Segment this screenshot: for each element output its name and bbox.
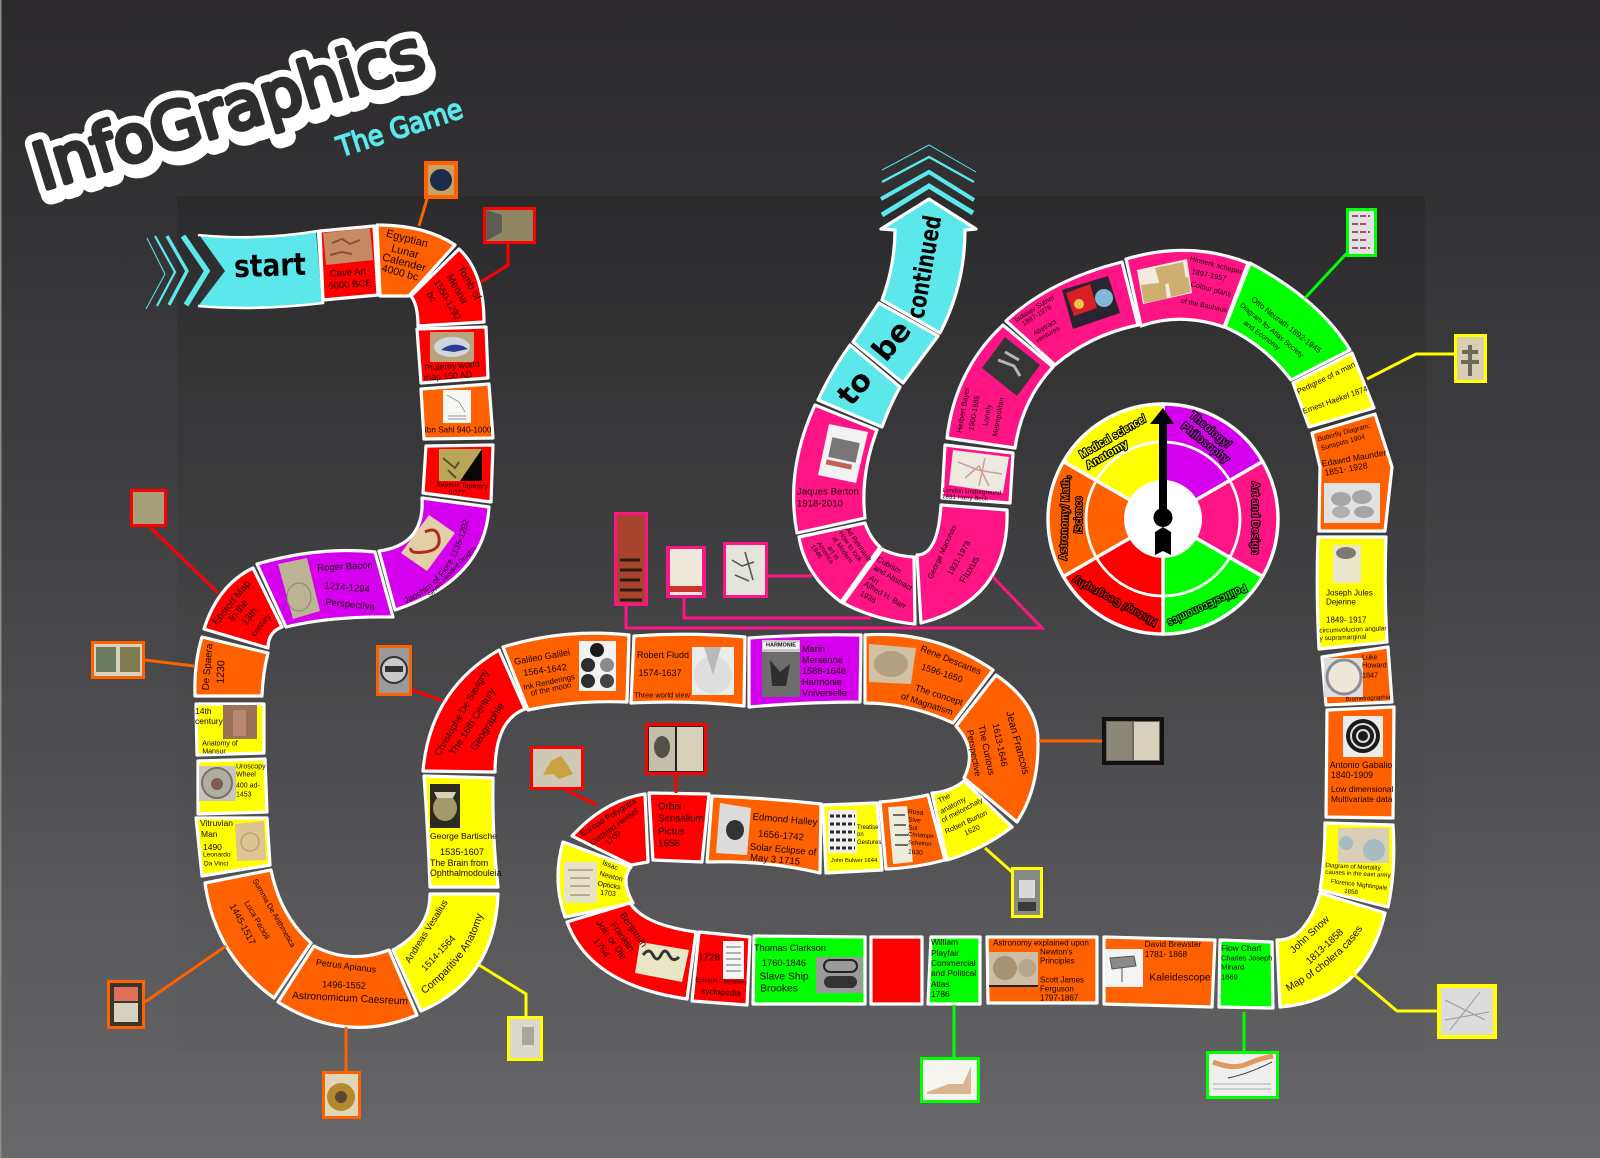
cell: George Macunas: Fluxus <box>958 554 982 586</box>
cell: Rene Descartes: of Magnatism <box>900 691 954 717</box>
cell: Ebstorf Map: 13th <box>240 606 260 628</box>
cell: Christophe De Savigny <box>423 650 525 772</box>
end chevrons <box>881 145 976 215</box>
cell: Antonio Gabalio: Multivariate data <box>1331 794 1393 804</box>
cell: Ibn Sahl: Ibn Sahl 940-1000 <box>425 426 492 434</box>
cell: Jaochim of Fiore: Seven Headed Dragon <box>427 545 478 599</box>
cell: Treatise on Gestures: on <box>857 832 864 838</box>
cell: Summa De Arithmetica <box>205 870 311 998</box>
cell: continued arrow: continued <box>901 213 947 321</box>
cell: Otto Neurath: and Economy <box>1242 318 1283 352</box>
cell: Luke Howard: Brometrographia <box>1346 695 1391 703</box>
cell: Benjamin Franklin Join or Die <box>567 903 696 999</box>
cell: Marin Mersenne: Vniverselle <box>802 688 847 698</box>
cell: Uroscopy Wheel: 400 ad- <box>236 782 260 790</box>
cell: Rene Descartes <box>865 634 993 723</box>
cell: Vitruvian Man <box>196 818 270 876</box>
cell: David Brewster: David Brewster <box>1145 939 1202 949</box>
cell: Astronomy explained: Principles <box>1040 956 1075 966</box>
cell: Issac Newton Opticks <box>558 842 633 917</box>
cell: Benjamin Franklin Join or Die: 1754 <box>590 936 612 960</box>
cell: Flow Chart Minard <box>1219 940 1273 1008</box>
cell: Ebstorf Map <box>204 568 282 648</box>
cell: Egyptian Lunar Calender: Egyptian <box>385 228 429 250</box>
cell: Edmond Halley: 1656-1742 <box>758 829 804 843</box>
cell: Marin Mersenne: 1588-1648 <box>802 666 846 676</box>
cell: George Macunas: 1931-1978 <box>946 539 973 577</box>
cell: Rosa Sive Sol: Sol <box>908 825 918 832</box>
cell: Ernest Haekel: Ernest Haekel 1874 <box>1301 384 1369 416</box>
cell: Edawrd Maunder <box>1312 414 1392 531</box>
cell: Marin Mersenne <box>749 635 861 707</box>
cell: Andreas Vesalius: Andreas Vesalius <box>402 897 450 965</box>
cell: Thomas Clarkson <box>753 936 865 1004</box>
cell: Flow Chart Minard: 1869 <box>1221 972 1238 982</box>
thumbnail: Robert Burton <box>985 848 1043 918</box>
cell: Petrus Apianus: Petrus Apianus <box>315 957 377 975</box>
cell: Hinnerk scheper: Colour plans <box>1190 279 1232 299</box>
title: InfoGraphics <box>25 16 433 205</box>
cell: Jaques Berton: Jaques Berton <box>797 486 859 498</box>
cell: George Bartische <box>424 776 502 887</box>
cell: continued arrow <box>881 199 976 333</box>
cell: Egyptian Lunar Calender: Calender <box>381 251 427 275</box>
cell: Jean Francois: The Curious <box>976 724 998 776</box>
cell: start <box>198 231 323 308</box>
cell: Jaques Berton <box>794 405 877 533</box>
cell: London underground: 1931 Harry Beck <box>942 493 989 503</box>
cell: ladislav Sutner: ladislav Sutner <box>1014 294 1057 324</box>
spinner arrow <box>1150 408 1174 555</box>
cell: blank red square <box>871 937 922 1004</box>
cell: George Bartische: The Brain from <box>430 858 488 868</box>
cell: Herbert Bayer: 1900-1985 <box>966 395 982 431</box>
cell: David Brewster: 1781- 1868 <box>1145 949 1188 959</box>
cell: Joseph Jules Dejerine <box>1317 537 1388 649</box>
cell: Hinnerk scheper: 1897-1957 <box>1191 267 1227 283</box>
cell: William Playfair: Atlas <box>931 979 950 989</box>
cell: David Brewster <box>1104 937 1215 1007</box>
cell: Herbert Bayer <box>947 325 1053 448</box>
cell: Christophe De Savigny: Christophe De Savigny <box>433 668 491 758</box>
cell: Robert Burton: Robert Burton <box>943 808 989 836</box>
cell: be <box>853 303 938 383</box>
thumbnail: Egyptian calendar <box>419 161 458 226</box>
cell: Ibn Sahl <box>421 384 493 439</box>
cell: Galileo Galilei: Galileo Galilei <box>513 647 571 667</box>
cell: Uroscopy Wheel: Wheel <box>236 772 256 778</box>
thumbnail: Tomb of Menna <box>481 207 536 282</box>
cell: to: to <box>830 363 880 413</box>
cell: Europa Polygotta: 1700 <box>603 828 623 847</box>
title: InfoGraphics <box>25 16 433 205</box>
thumbnail: Neurath <box>1305 208 1377 298</box>
cell: Antonio Gabalio: 1840-1909 <box>1331 770 1373 780</box>
cell: Benjamin Franklin Join or Die: Join or Die <box>593 918 629 962</box>
cell: Europa Polygotta: Europa Polygotta <box>578 796 638 838</box>
cell: Rosa Sive Sol: Scheiner <box>908 840 932 848</box>
cell: Herbert Bayer: Metropolitan <box>990 397 1006 437</box>
spinner wheel: Art and Design <box>1249 482 1261 555</box>
spinner wheel: Astronomy/ Math, <box>1058 475 1072 561</box>
thumbnail: Summa <box>107 946 226 1029</box>
cell: Luke Howard: Luke <box>1362 652 1378 662</box>
cell: Jean Francois: Perspective <box>965 729 983 777</box>
spinner wheel: Anatomy <box>1084 438 1131 472</box>
cell: Andreas Vesalius: Comparitive Anatomy <box>422 913 484 993</box>
cell: Joseph Jules Dejerine: y supramarginal <box>1319 634 1367 642</box>
cell: Astronomy explained: 1797-1867 <box>1040 994 1079 1002</box>
cell: Issac Newton Opticks: Newton <box>599 871 623 883</box>
cell: Cubism and Abstract Art <box>843 549 915 624</box>
cell: Joseph Jules Dejerine: circumvolucion angular <box>1319 625 1388 635</box>
cell: Florence Nightingale <box>1320 823 1394 907</box>
thumbnail: Europa Polygotta <box>530 746 597 805</box>
cell: Antonio Gabalio <box>1326 707 1394 818</box>
thumbnail: Fluxus poster <box>614 512 1042 628</box>
cell: Ephriam Chambers 1728: Ephriam Chambers <box>695 978 747 986</box>
cell: Joseph Jules Dejerine: Joseph Jules <box>1326 588 1373 598</box>
cell: Egyptian Lunar Calender <box>377 225 455 296</box>
start chevrons <box>146 236 207 309</box>
cell: Cubism and Abstract Art: Cubism <box>875 554 903 576</box>
cell: Egyptian Lunar Calender: 4000 bc <box>380 262 420 284</box>
cell: Ad Reinhardt: Ad Reinhardt <box>844 527 872 563</box>
cell: Treatise on Gestures: Treatise <box>857 825 879 831</box>
cell: Galileo Galilei: of the moon <box>530 680 572 698</box>
cell: Bayeux Tapestry <box>423 445 493 502</box>
cell: Ad Reinhardt: art in <box>826 545 840 561</box>
cell: Robert Fludd: Robert Fludd <box>637 650 689 660</box>
thumbnail: Reinhardt chart <box>723 542 812 598</box>
cell: Cave Art <box>320 226 378 300</box>
cell: Astronomy explained: Astronomy explained upon <box>993 938 1089 948</box>
cell: Flow Chart Minard: Charles Joseph <box>1221 954 1272 962</box>
cell: Treatise on Gestures: John Bulwer 1644 <box>831 858 878 864</box>
cell: Ebstorf Map: In the <box>227 597 251 624</box>
cell: Cubism and Abstract Art: 1936 <box>858 589 878 605</box>
cell: Cubism and Abstract Art: Art <box>867 574 881 587</box>
cell: Uroscopy Wheel: Uroscopy <box>236 764 266 770</box>
thumbnail: Playfair chart <box>920 1005 980 1103</box>
cell: Issac Newton Opticks: Issac <box>601 860 619 872</box>
thumbnail: De Savigny <box>376 645 443 701</box>
cell: Bayeux Tapestry: Bayeux Tapestry <box>436 481 488 491</box>
cell: Roger Bacon: 1214-1294 <box>324 581 370 595</box>
cell: Edawrd Maunder: Butterfly Diagram: <box>1317 423 1371 443</box>
cell: Otto Neurath: Otto Neurath 1892-1945 <box>1249 295 1323 355</box>
cell: De Spaera <box>195 637 268 696</box>
cell: John Snow <box>1275 892 1387 1009</box>
cell: Petrus Apianus <box>278 946 417 1027</box>
cell: Andreas Vesalius <box>391 892 500 1013</box>
cell: William Playfair <box>928 937 980 1004</box>
cell: Cubism and Abstract Art: and Abstract <box>872 563 915 593</box>
cell: Jean Francois: Jean Francois <box>1003 710 1031 776</box>
cell: start: start <box>233 247 307 285</box>
thumbnail: Petrus Apianus <box>322 1027 361 1119</box>
cell: Robert Burton: of melonchaly <box>940 795 985 825</box>
cell: Ebstorf Map: Ebstorf Map <box>211 578 254 627</box>
cell: George Bartische: 1535-1607 <box>440 847 484 857</box>
cell: Herbert Bayer: Lonely <box>981 403 993 427</box>
spinner wheel: History/ Geography <box>1070 573 1159 628</box>
cell: be: be <box>865 314 919 368</box>
cell: Rene Descartes: 1596-1650 <box>920 662 964 684</box>
cell: Edawrd Maunder: Edawrd Maunder <box>1321 447 1387 469</box>
cell: Astronomy explained: Scott James <box>1040 976 1084 984</box>
cell: Ad Reinhardt: at Modern <box>830 535 854 565</box>
thumbnail: Haekel <box>1367 334 1487 383</box>
cell: Galileo Galilei: 1564-1642 <box>523 662 567 678</box>
cell: Vitruvian Man: Vitruvian <box>200 818 233 828</box>
title: InfoGraphics <box>28 23 436 212</box>
cell: Benjamin Franklin Join or Die: Franklin <box>608 920 636 954</box>
cell: Cave Art: 6000 BCE <box>328 278 372 292</box>
cell: Robert Burton: anatomy <box>938 794 968 816</box>
cell: Hinnerk scheper: Hinnerk scheper <box>1189 254 1244 276</box>
cell: Rene Descartes: Rene Descartes <box>919 643 983 677</box>
cell: Orbis Sensalium Pictus: Pictus <box>658 826 685 838</box>
thumbnail: De Spaera <box>91 641 194 679</box>
cell: Vitruvian Man: Leonardo <box>203 852 231 858</box>
cell: Cubism and Abstract Art: Alfred H. Barr <box>862 579 908 611</box>
thumbnail: Ebstorf Map <box>130 489 218 593</box>
cell: Edmond Halley: Solar Eclipse of <box>749 842 817 858</box>
cell: Astronomy explained: Newton's <box>1040 948 1073 956</box>
cell: Ephriam Chambers 1728 <box>692 932 750 1005</box>
cell: Marin Mersenne: Harmonie <box>802 677 842 687</box>
cell: George Bartische: George Bartische <box>430 831 497 841</box>
cell: Hinnerk scheper <box>1126 250 1248 327</box>
cell: Robert Fludd: 1574-1637 <box>638 668 682 678</box>
cell: Antonio Gabalio: Low dimensional <box>1331 784 1394 794</box>
cell: Roger Bacon: Perspectiva <box>325 597 376 613</box>
cell: to <box>818 345 900 427</box>
cell: Jean Francois: 1613-1646 <box>991 722 1009 768</box>
cell: Europa Polygotta: Gottfried Hensel <box>588 806 640 848</box>
cell: Orbis Sensalium Pictus: Sensalium <box>658 814 704 824</box>
thumbnail: Cubism chart <box>666 546 871 618</box>
cell: Edmond Halley <box>707 796 821 873</box>
cell: William Playfair: and Political <box>931 968 976 978</box>
cell: Ad Reinhardt: 1946 <box>809 544 823 560</box>
cell: George Bartische: Ophthalmodouleia <box>430 868 502 878</box>
cell: George Macunas <box>917 505 1007 623</box>
cell: Robert Burton <box>932 781 1012 860</box>
cell: John Snow: Map of cholera cases <box>1286 926 1362 992</box>
cell: London underground: London Underground <box>943 487 1002 497</box>
cell: Joseph Jules Dejerine: 1849- 1917 <box>1326 616 1367 624</box>
cell: Edawrd Maunder: 1851- 1928 <box>1324 460 1368 478</box>
cell: George Macunas: George Macunas <box>926 524 958 580</box>
cell: ladislav Sutner <box>1006 262 1138 365</box>
cell: Thomas Clarkson: Slave Ship <box>759 972 809 982</box>
cell: William Playfair: Playfair <box>931 948 959 958</box>
cell: Treatise on Gestures <box>823 803 882 873</box>
cell: De Spaera: 1230 <box>215 660 227 684</box>
cell: Marin Mersenne: HARMONIE <box>766 642 796 648</box>
cell: De Spaera: De Spaera <box>200 643 216 691</box>
cell: Cave Art: Cave Art <box>329 266 367 280</box>
cell: Ebstorf Map: century <box>249 612 273 638</box>
cell: Marin Mersenne: Marin <box>802 644 825 654</box>
cell: Flow Chart Minard: Minard <box>1221 962 1244 972</box>
cell: Antonio Gabalio: Antonio Gabalio <box>1330 760 1392 770</box>
cell: Edmond Halley: Edmond Halley <box>752 812 818 828</box>
cell: Uroscopy Wheel: 1453 <box>236 792 252 798</box>
cell: Treatise on Gestures: Gestures <box>857 840 881 846</box>
cell: Ptolemy world map: Ptolemy world <box>424 359 480 373</box>
cell: Robert Fludd: Three world view <box>634 690 691 700</box>
cell: Roger Bacon: Roger Bacon <box>317 560 373 574</box>
spinner wheel: Theology/ <box>1187 409 1233 451</box>
cell: Otto Neurath: Diagram for Atlas Society <box>1238 301 1306 360</box>
cell: Orbis Sensalium Pictus: Orbis <box>658 802 682 812</box>
cell: Tomb of Menna: 1550-1292 <box>431 278 463 322</box>
cell: Galileo Galilei <box>503 633 629 710</box>
spinner wheel <box>1048 404 1278 634</box>
cell: Thomas Clarkson: Brookes <box>760 984 798 994</box>
subtitle: The Game <box>332 92 467 164</box>
cell: Petrus Apianus: Astronomicum Caesreum <box>292 990 408 1008</box>
cell: Flow Chart Minard: Flow Chart <box>1221 943 1262 953</box>
cell: Ad Reinhardt: How to look <box>837 530 863 564</box>
cell: Edmond Halley: May 3 1715 <box>750 852 800 868</box>
thumbnail: John Snow map <box>1352 973 1497 1039</box>
cell: Jaochim of Fiore <box>377 496 491 612</box>
cell: Christophe De Savigny: Geographie <box>469 701 507 753</box>
cell: Galileo Galilei: Ink Renderings <box>522 672 576 692</box>
cell: Joseph Jules Dejerine: Dejerine <box>1326 598 1356 606</box>
cell: Florence Nightingale: 1858 <box>1344 888 1359 896</box>
cell: ladislav Sutner: ventures <box>1035 325 1062 345</box>
cell: Jean Francois <box>956 675 1038 822</box>
cell: 14th century Anatomy of Mansur: 14th <box>195 706 212 716</box>
cell: Christophe De Savigny: The 16th Century <box>448 686 498 758</box>
cell: Ad Reinhardt: America <box>815 541 835 565</box>
cell: Roger Bacon <box>257 550 393 627</box>
cell: William Playfair: William <box>931 937 958 947</box>
cell: David Brewster: Kaleidescope <box>1149 972 1211 984</box>
cell: Robert Burton: The <box>936 791 952 805</box>
cell: Summa De Arithmetica: Summa De Arithmetica <box>251 877 298 950</box>
cell: Ernest Haekel: Pedigree of a man <box>1295 360 1357 396</box>
cell: Rosa Sive Sol: Rosa <box>908 809 924 817</box>
cell: Luke Howard: 1847 <box>1362 670 1378 680</box>
cell: Benjamin Franklin Join or Die: Benjamin <box>617 910 649 950</box>
cell: William Playfair: 1786 <box>931 989 950 999</box>
cell: Rosa Sive Sol <box>880 795 945 869</box>
cell: 14th century Anatomy of Mansur <box>195 704 264 756</box>
cell: Florence Nightingale: Florence Nightingale <box>1330 878 1388 892</box>
cell: Edawrd Maunder: Sunspots 1904 <box>1320 434 1366 452</box>
cell: Egyptian Lunar Calender: Lunar <box>390 243 420 262</box>
cell: Thomas Clarkson: 1760-1846 <box>762 958 806 968</box>
cell: 14th century Anatomy of Mansur: Anatomy of <box>202 740 238 748</box>
cell: Andreas Vesalius: 1514-1564 <box>419 933 457 973</box>
cell: Vitruvian Man: Man <box>201 829 218 839</box>
cell: Jaques Berton: 1918-2010 <box>797 498 843 510</box>
cell: Ad Reinhardt <box>799 523 880 602</box>
cell: Issac Newton Opticks: Opticks <box>597 881 622 892</box>
cell: Luke Howard <box>1322 647 1392 705</box>
cell: Jaochim of Fiore: Jaochim of Fiore 1135-1202 <box>404 520 469 603</box>
cell: Robert Fludd <box>631 634 745 706</box>
cell: Summa De Arithmetica: Luca Pacioli <box>242 899 272 941</box>
cell: 14th century Anatomy of Mansur: century <box>195 716 224 726</box>
spinner wheel: /Science <box>1073 496 1085 534</box>
spinner wheel: Politics/Economics <box>1165 581 1249 629</box>
cell: Issac Newton Opticks: 1703 <box>600 890 616 898</box>
cell: Bayeux Tapestry: 1077 <box>449 489 465 497</box>
cell: Europa Polygotta <box>572 794 648 865</box>
cell: Herbert Bayer: Herbert Bayer <box>955 386 972 433</box>
cell: Florence Nightingale: causes in the east army <box>1325 869 1392 879</box>
cell: Summa De Arithmetica: 1445-1517 <box>228 902 258 946</box>
cell: Ptolemy world map: map 150 AD <box>423 369 473 383</box>
thumbnail: Jean Francois <box>1039 717 1164 765</box>
cell: Ephriam Chambers 1728: 1728 <box>698 952 721 964</box>
thumbnail: Orbis <box>645 723 707 793</box>
cell: Tomb of Menna: Tomb of <box>454 264 484 302</box>
spinner wheel: Philosophy <box>1178 420 1232 466</box>
cell: Orbis Sensalium Pictus: 1658 <box>658 838 680 850</box>
cell: John Snow: 1813-1858 <box>1304 927 1346 967</box>
cell: 14th century Anatomy of Mansur: Mansur <box>202 748 226 756</box>
cell: ladislav Sutner: Abstract <box>1032 319 1058 337</box>
cell: Luke Howard: Howard <box>1362 660 1387 670</box>
cell: Astronomy explained <box>987 937 1097 1003</box>
thumbnail: Vesalius <box>479 965 543 1061</box>
cell: London underground <box>942 445 1013 503</box>
cell: Tomb of Menna <box>411 249 484 326</box>
spinner wheel: Medical science/ <box>1078 413 1148 461</box>
cell: Florence Nightingale: Diagram of Mortality <box>1325 862 1382 872</box>
cell: Ptolemy world map <box>417 327 488 383</box>
cell: Hinnerk scheper: of the Bauhaus <box>1180 298 1228 314</box>
cell: Robert Burton: 1620 <box>963 822 981 838</box>
cell: William Playfair: Commercial <box>931 958 976 968</box>
cell: Tomb of Menna: Menna <box>444 272 470 306</box>
cell: Orbis Sensalium Pictus <box>649 793 709 862</box>
cell: Vitruvian Man: Da Vinci <box>204 860 228 868</box>
cell: Uroscopy Wheel <box>198 759 267 814</box>
cell: Ernest Haekel <box>1293 353 1374 427</box>
cell: Astronomy explained: Ferguson <box>1040 984 1074 994</box>
cell: Rene Descartes: The concept <box>914 683 965 708</box>
cell: Petrus Apianus: 1496-1552 <box>322 979 366 991</box>
cell: Rosa Sive Sol: Sive <box>908 817 921 825</box>
cell: ladislav Sutner: 1897-1976 <box>1021 304 1053 328</box>
cell: John Snow: John Snow <box>1288 914 1332 956</box>
cell: Tomb of Menna: bc <box>424 290 438 304</box>
thumbnail: Minard map <box>1206 1012 1279 1099</box>
cell: Vitruvian Man: 1490 <box>203 842 222 852</box>
cell: Thomas Clarkson: Thomas Clarkson <box>754 943 826 953</box>
cell: Ephriam Chambers 1728: cyclopedia <box>701 986 741 998</box>
cell: Otto Neurath <box>1225 263 1350 380</box>
cell: Rosa Sive Sol: 1630 <box>908 849 923 857</box>
cell: Rosa Sive Sol: Christoph <box>908 832 934 840</box>
cell: Marin Mersenne: Mersenne <box>802 655 843 665</box>
